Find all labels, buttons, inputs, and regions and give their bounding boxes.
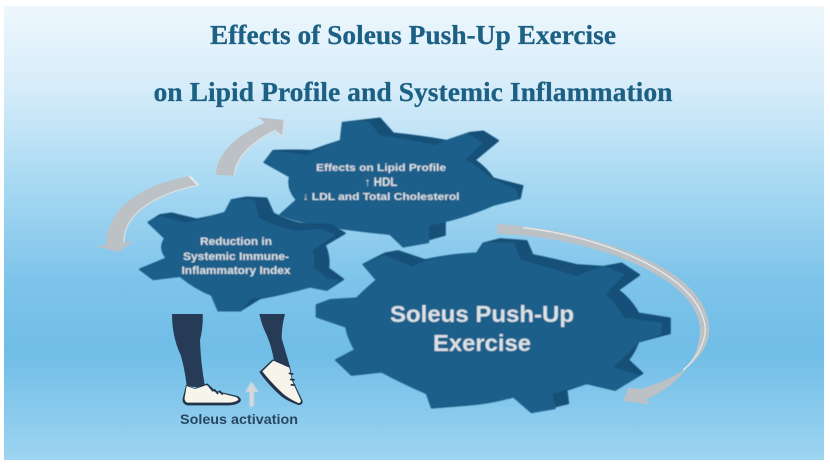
label: lipid profile xyxy=(302,162,460,203)
label: inflammatory index: Reduction in xyxy=(200,236,272,248)
icon: up arrow xyxy=(245,382,258,406)
right shoe xyxy=(259,359,303,405)
left leg xyxy=(172,314,205,388)
label: inflammatory index: Inflammatory Index xyxy=(182,265,291,277)
arrow: large curved arrow around exercise gear xyxy=(497,224,709,404)
label: lipid profile: ↑ HDL xyxy=(365,177,397,189)
label: soleus push-up exercise xyxy=(390,301,574,356)
title: on Lipid Profile and Systemic Inflammation xyxy=(154,77,672,107)
arrow: left curved arrow xyxy=(96,176,198,252)
caption: soleus activation: Soleus activation xyxy=(180,412,298,427)
title xyxy=(154,20,672,107)
gear: soleus push-up exercise xyxy=(317,239,670,412)
title: Effects of Soleus Push-Up Exercise xyxy=(210,20,616,50)
right leg xyxy=(259,314,290,367)
label: soleus push-up exercise: Soleus Push-Up xyxy=(390,301,574,327)
label: lipid profile: Effects on Lipid Profile xyxy=(316,162,446,174)
left shoe xyxy=(183,383,241,405)
illustration: legs and shoes xyxy=(172,314,303,405)
gear: systemic immune-inflammatory index xyxy=(140,197,345,311)
label: lipid profile: ↓ LDL and Total Cholesterol xyxy=(302,191,460,203)
label: soleus push-up exercise: Exercise xyxy=(433,330,531,356)
gear: lipid profile effects xyxy=(264,118,523,247)
label: inflammatory index xyxy=(182,236,291,277)
arrow: lipid profile to inflammation, upper curved arrow xyxy=(216,117,284,176)
label: inflammatory index: Systemic Immune- xyxy=(183,251,289,263)
